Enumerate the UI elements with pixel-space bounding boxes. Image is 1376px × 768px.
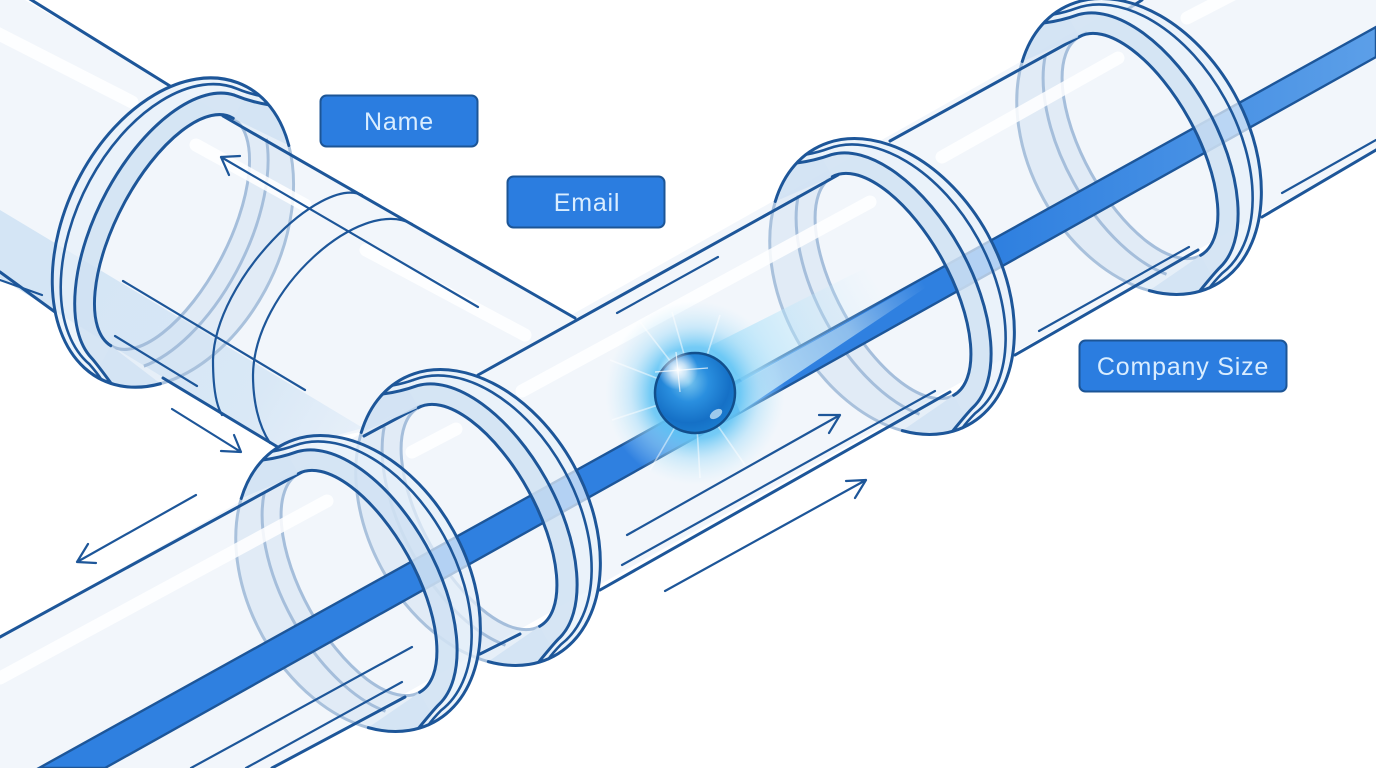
ring 5: branch coupling: [3, 32, 302, 408]
arrow: inside branch: [221, 156, 478, 307]
label: Name: Name: [364, 108, 434, 136]
ring 3: lower coupling rear: [348, 326, 650, 685]
glass sphere: [655, 350, 735, 433]
label: Name: [320, 96, 478, 146]
glass highlights: [0, 0, 1245, 678]
label: Company Size: Company Size: [1097, 353, 1269, 381]
label: Email: Email: [554, 189, 620, 217]
ring 2: middle coupling: [762, 95, 1064, 454]
ring 4: lower coupling front: [228, 392, 530, 751]
label: Email: [508, 176, 664, 228]
arrow: rightward below tube: [665, 480, 866, 591]
branch shaded underside: [0, 210, 363, 449]
sphere lower reflection: [708, 407, 724, 421]
glow trail behind the sphere: [605, 268, 925, 485]
branch tube body: [0, 0, 575, 449]
label: Company Size: [1080, 340, 1286, 392]
sphere sparkle: [658, 350, 698, 390]
ring 1: upper right coupling: [1009, 0, 1311, 314]
arrow: leftward along tube: [77, 495, 196, 563]
arrow: into junction: [172, 409, 241, 452]
arrow: rightward inside tube: [627, 415, 840, 535]
